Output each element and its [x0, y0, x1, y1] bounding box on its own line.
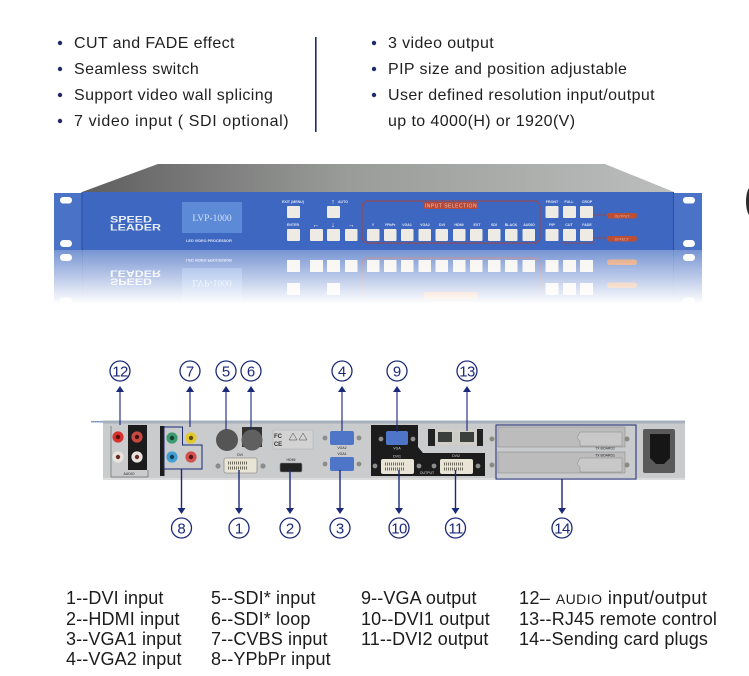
- output ports block: DVI2: [452, 454, 460, 458]
- input selection group: SDI: [491, 223, 497, 227]
- device reflection: SPEED: [110, 276, 153, 286]
- feature list: right column: [372, 35, 655, 130]
- callout 6: SDI loop: 6: [247, 364, 255, 380]
- feature list: left column: 7 video input ( SDI optional): [74, 113, 289, 130]
- menu and arrow buttons: AUTO: [338, 200, 348, 204]
- legend column 2: 6--SDI* loop: [211, 609, 310, 629]
- legend column 1: 1--DVI input: [66, 588, 163, 608]
- output and effect buttons: EFFECT: [615, 238, 630, 242]
- legend column 2: 8--YPbPr input: [211, 649, 331, 669]
- LCD display: [182, 202, 242, 233]
- legend column 2: 5--SDI* input: [211, 588, 316, 608]
- certification label: [273, 430, 313, 449]
- output ports block: DVI1: [393, 454, 401, 458]
- output and effect buttons: FADE: [582, 223, 592, 227]
- callout 3: VGA1: 3: [336, 520, 344, 538]
- VGA input ports: VGA2: [337, 446, 347, 450]
- callout 6: SDI loop: [241, 361, 261, 430]
- output ports block: VGA: [393, 446, 401, 450]
- callout 5: SDI input: 5: [222, 364, 230, 380]
- feature list: left column: Seamless switch: [74, 61, 199, 78]
- input selection group: HDMI: [454, 223, 464, 227]
- legend column 3: 11--DVI2 output: [361, 629, 489, 649]
- audio ports: AUDIO: [123, 472, 135, 476]
- legend column 4: 14--Sending card plugs: [519, 629, 708, 649]
- legend column 4: [519, 588, 717, 649]
- menu and arrow buttons: ←: [312, 222, 320, 229]
- input selection group: AUDIO: [523, 223, 535, 227]
- SDI ports: [216, 427, 262, 451]
- callout 5: SDI input: [216, 361, 236, 430]
- output and effect buttons: CROP: [582, 200, 593, 204]
- VGA input ports: VGA1: [337, 452, 347, 456]
- input selection group: YPbPr: [385, 223, 396, 227]
- input selection group: EXT: [474, 223, 481, 227]
- menu and arrow buttons: EXIT (MENU): [282, 200, 305, 204]
- callout 2: HDMI: [280, 470, 300, 538]
- callout 13: RJ45: [457, 361, 477, 431]
- output and effect buttons: FULL: [564, 200, 574, 204]
- input selection group: VGA1: [402, 223, 412, 227]
- device top cover: [82, 164, 674, 192]
- menu and arrow buttons: ↑: [331, 199, 335, 206]
- legend column 4: 13--RJ45 remote control: [519, 609, 717, 629]
- input selection group: [362, 201, 540, 243]
- feature list: right column: PIP size and position adjustable: [388, 61, 627, 78]
- output and effect buttons: PIP: [549, 223, 555, 227]
- legend column 1: 2--HDMI input: [66, 609, 180, 629]
- sending card slots: [490, 427, 630, 473]
- YPbPr highlight outline: [164, 427, 202, 469]
- device reflection: LED VIDEO PROCESSOR: [186, 258, 232, 262]
- device reflection: LVP-1000: [192, 277, 232, 287]
- legend column 2: 7--CVBS input: [211, 629, 328, 649]
- audio ports: [111, 425, 148, 477]
- callout 2: HDMI: 2: [286, 520, 294, 538]
- feature list: right column: User defined resolution input/output: [388, 87, 655, 104]
- certification label: FC: [274, 434, 283, 440]
- RJ45 remote ports: [428, 429, 483, 446]
- callout 10: DVI1: 10: [391, 520, 407, 538]
- front panel device: [54, 164, 702, 251]
- callout 12: audio: [110, 361, 130, 425]
- output and effect buttons: FRONT: [546, 200, 559, 204]
- sending card slots: TX BOARD1: [595, 454, 615, 458]
- edge of next image at right margin: [746, 188, 749, 215]
- right rack ear: [674, 193, 702, 251]
- sending card slots: TX BOARD2: [595, 446, 615, 450]
- blue faceplate: [82, 192, 674, 251]
- menu and arrow buttons: ENTER: [287, 223, 299, 227]
- feature list: right column: 3 video output: [388, 35, 494, 52]
- HDMI port: [280, 458, 302, 472]
- output ports block: [371, 425, 485, 476]
- callout 8: YPbPr: 8: [177, 520, 186, 538]
- callout 4: VGA2: [332, 361, 352, 431]
- feature list: left column: CUT and FADE effect: [74, 35, 235, 52]
- output and effect buttons: [546, 200, 637, 243]
- legend column 1: [66, 588, 182, 669]
- callout 11: DVI2: [446, 470, 466, 538]
- callout 14: sending cards: [552, 479, 572, 538]
- input selection group: Y: [372, 223, 375, 227]
- callout 1: DVI input: 1: [235, 520, 243, 538]
- device reflection: [50, 250, 706, 310]
- feature list: right column: up to 4000(H) or 1920(V): [388, 113, 575, 130]
- callout 1: DVI input: [229, 470, 249, 538]
- input selection group: DVI: [439, 223, 445, 227]
- callout 10: DVI1: [389, 470, 409, 538]
- device reflection: LEADER: [110, 268, 162, 278]
- callout 7: CVBS: [180, 361, 200, 427]
- callout 12: audio: 12: [112, 364, 128, 380]
- callout 8: YPbPr: [172, 469, 192, 538]
- callout 4: VGA2: 4: [338, 364, 346, 380]
- input selection group: BLACK: [505, 223, 518, 227]
- logo: [110, 214, 162, 232]
- rear panel device: [91, 420, 685, 480]
- legend column 1: 4--VGA2 input: [66, 649, 182, 669]
- video RCA ports: [160, 426, 197, 476]
- output and effect buttons: OUTPUT: [615, 214, 630, 218]
- legend column 4: 12– AUDIO input/output: [519, 588, 707, 608]
- legend column 2: [211, 588, 331, 669]
- callout 9: VGA output: 9: [393, 364, 401, 380]
- product caption: LED VIDEO PROCESSOR: [186, 239, 232, 243]
- sending cards highlight outline: [496, 425, 636, 479]
- rear chassis: [91, 421, 104, 422]
- power socket: [643, 429, 675, 473]
- input selection group: INPUT SELECTION: [425, 204, 477, 210]
- certification label: CE: [274, 442, 282, 448]
- VGA input ports: [323, 431, 361, 471]
- callout 3: VGA1: [330, 470, 350, 538]
- left rack ear: [54, 193, 82, 251]
- output ports block: OUTPUT: [420, 471, 435, 475]
- HDMI port: HDMI: [287, 458, 295, 462]
- legend column 1: 3--VGA1 input: [66, 629, 182, 649]
- legend column 3: 9--VGA output: [361, 588, 477, 608]
- DVI input port: [215, 453, 266, 473]
- callout 9: VGA output: [387, 361, 407, 432]
- callout 13: RJ45: 13: [459, 364, 475, 380]
- callout 7: CVBS: 7: [186, 364, 194, 380]
- callout 11: DVI2: 11: [448, 520, 463, 538]
- output and effect buttons: CUT: [565, 223, 573, 227]
- feature list: left column: [58, 35, 289, 130]
- DVI input port: DVI: [237, 453, 243, 457]
- menu and arrow buttons: ↓: [331, 222, 335, 229]
- input selection group: VGA2: [420, 223, 430, 227]
- legend column 3: [361, 588, 490, 649]
- logo: SPEED: [110, 214, 153, 224]
- menu and arrow buttons: →: [348, 222, 354, 229]
- logo: LEADER: [110, 222, 162, 232]
- legend column 3: 10--DVI1 output: [361, 609, 490, 629]
- LCD display: LVP-1000: [192, 214, 232, 224]
- menu and arrow buttons: [282, 199, 358, 241]
- column divider: [315, 37, 317, 132]
- feature list: left column: Support video wall splicing: [74, 87, 273, 104]
- callout 14: sending cards: 14: [554, 520, 570, 538]
